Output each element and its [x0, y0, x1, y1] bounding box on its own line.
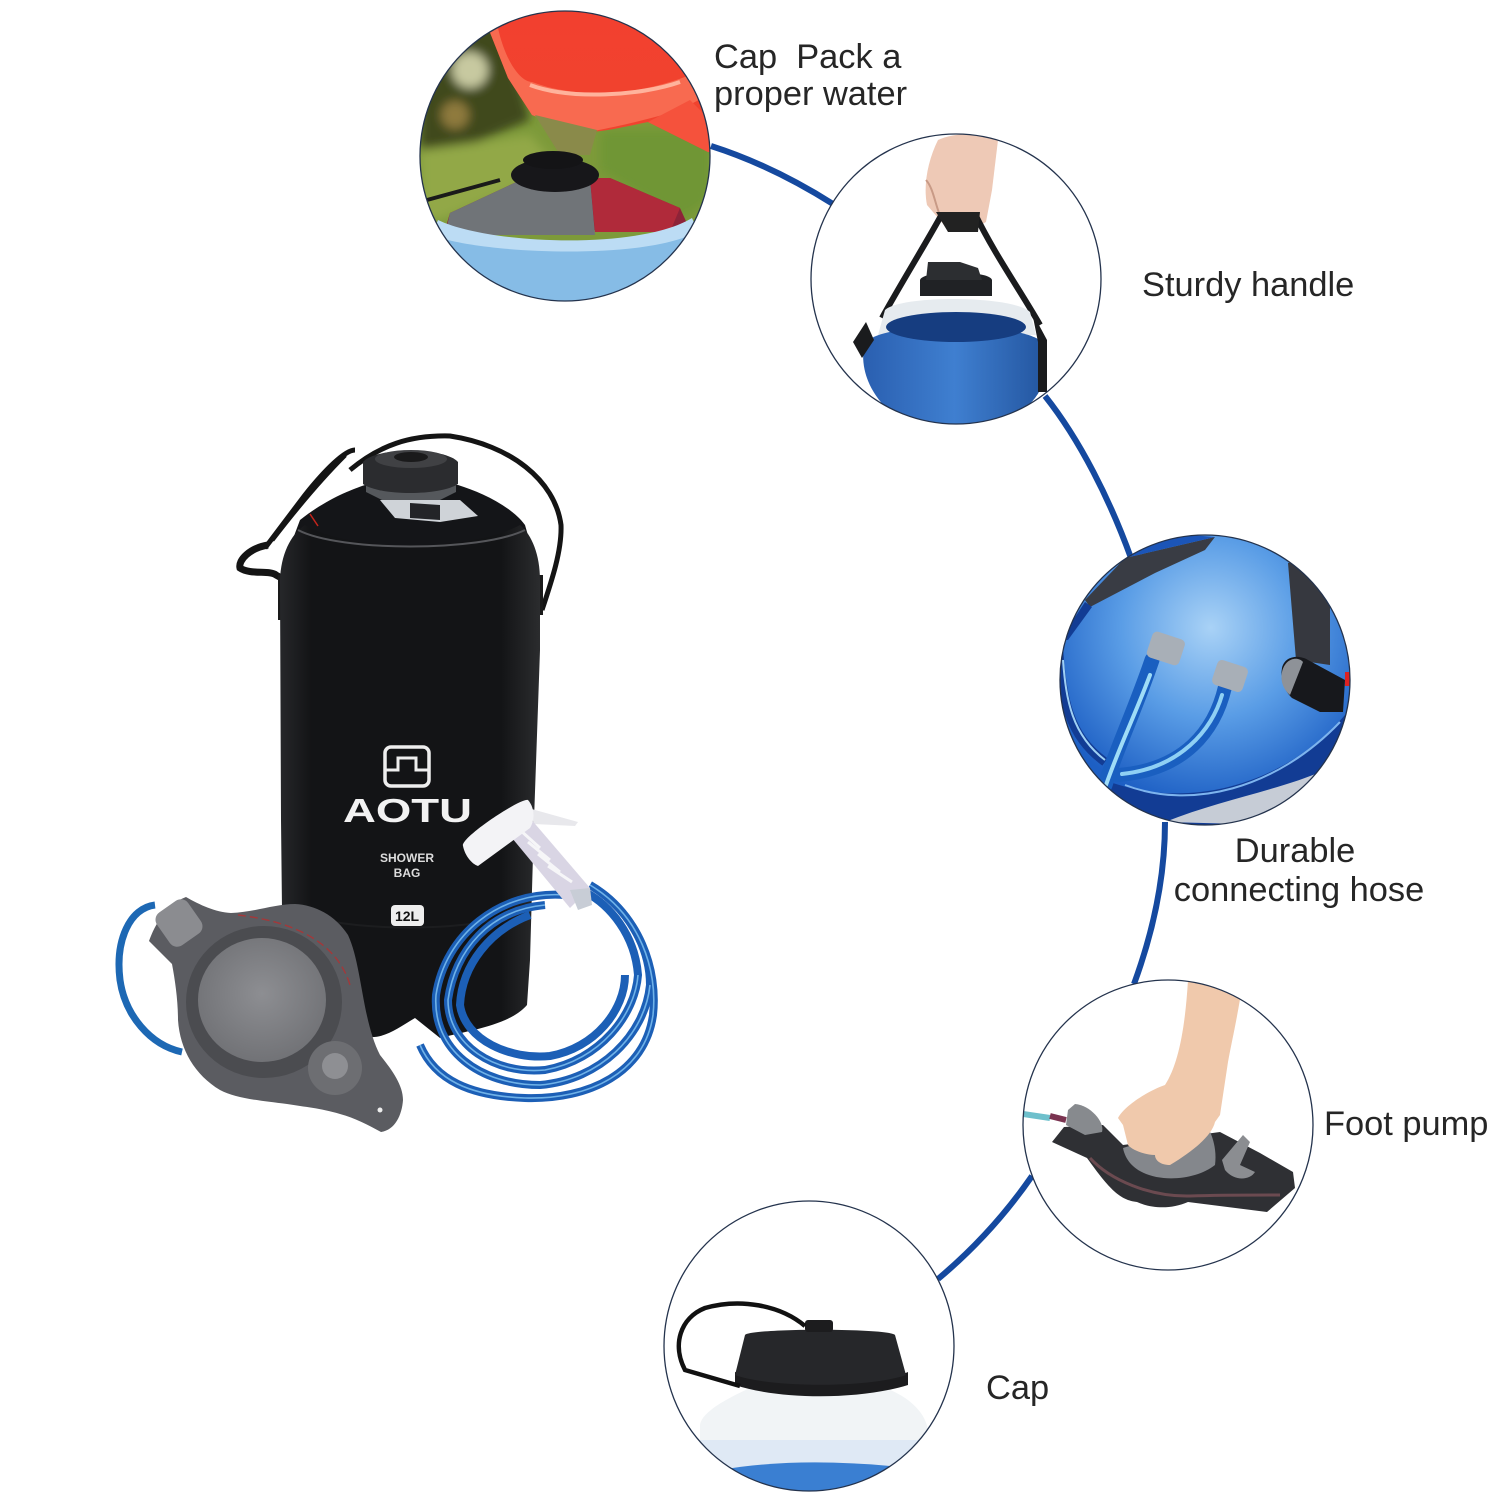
photo circle outline 1 — [420, 11, 710, 301]
photo circle: foot pump — [1024, 982, 1295, 1212]
caption: cap pack a proper water — [714, 38, 907, 113]
foot pump — [119, 905, 182, 1052]
water stream — [535, 115, 597, 155]
photo circle outline 2 — [811, 134, 1101, 424]
body — [280, 525, 540, 1038]
caption: cap pack a proper water: proper water — [714, 75, 907, 113]
pump base — [1052, 1125, 1295, 1212]
photo circle: bag bottom with hoses — [1058, 530, 1350, 825]
fittings — [1146, 632, 1185, 666]
top strap — [1085, 537, 1215, 607]
photo circle outline 4 — [1023, 980, 1313, 1270]
straps — [882, 214, 1040, 325]
main product: shower bag: AOTU — [343, 792, 472, 829]
photo circle: sturdy handle — [831, 134, 1047, 424]
bag light-blue rim and body — [437, 218, 694, 252]
caption: durable connecting hose: Durable — [1235, 832, 1355, 870]
main product: shower bag: 12L — [395, 908, 420, 924]
dark bottom seam — [1105, 715, 1345, 825]
cap — [920, 272, 992, 296]
caption: foot pump: Foot pump — [1324, 1105, 1488, 1143]
logo — [385, 747, 429, 786]
main product: shower bag: SHOWER — [380, 851, 434, 865]
photo circle: cap — [676, 1301, 928, 1490]
main product: shower bag: BAG — [394, 866, 420, 880]
caption: durable connecting hose — [1174, 832, 1424, 909]
cap — [363, 451, 458, 493]
hand — [926, 134, 998, 232]
photo circle outline 3 — [1060, 535, 1350, 825]
bag shoulder and neck — [445, 178, 690, 230]
dome — [1123, 1132, 1216, 1178]
photo circle outline 5 — [664, 1201, 954, 1491]
photo circle: pouring water into the bag — [420, 10, 720, 310]
left loop edge — [1058, 640, 1105, 762]
caption: durable connecting hose: connecting hose — [1174, 871, 1424, 909]
red arrow mark — [310, 514, 318, 526]
blue hose coils — [420, 885, 654, 1098]
main product: shower bag — [119, 436, 654, 1132]
strap — [350, 436, 561, 610]
funnel — [489, 10, 720, 152]
neck and dome — [285, 485, 535, 560]
connecting blue arc lines — [711, 146, 1165, 1279]
clear collar — [878, 299, 1036, 335]
buckle — [1281, 657, 1345, 712]
caption: cap pack a proper water: Cap Pack a — [714, 38, 902, 76]
fitting — [1066, 1104, 1102, 1135]
caption: cap: Cap — [986, 1369, 1049, 1407]
hoses — [1105, 660, 1225, 785]
right strap — [1288, 562, 1330, 665]
shower head — [528, 808, 578, 826]
blue body — [863, 332, 1039, 424]
caption: sturdy handle: Sturdy handle — [1142, 266, 1354, 304]
foot and leg — [1118, 980, 1243, 1165]
